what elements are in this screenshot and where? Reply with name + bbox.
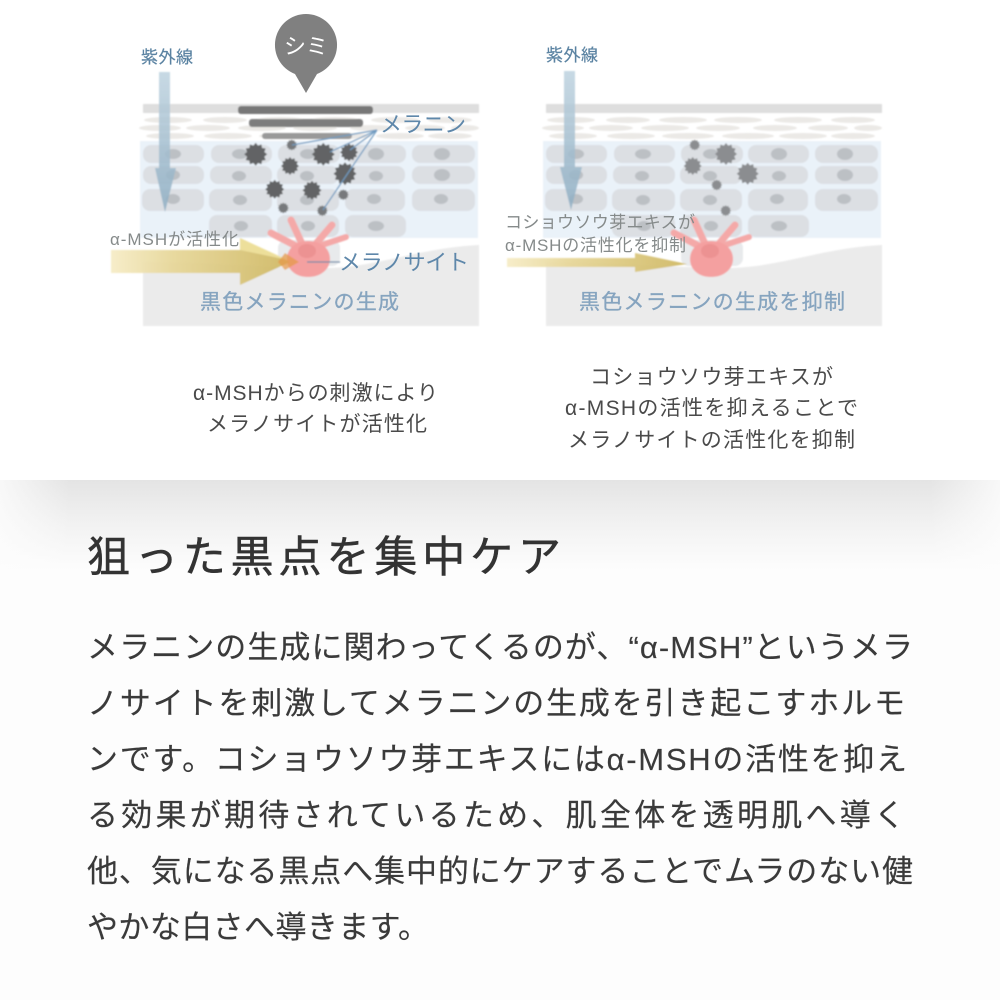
label: UV right: 紫外線 [546, 46, 598, 65]
label: black melanin suppressed: 黒色メラニンの生成を抑制 [579, 291, 845, 314]
label: extract suppresses: α-MSHの活性化を抑制 [505, 236, 686, 255]
heading: 狙った黒点を集中ケア [87, 534, 561, 582]
arrow: UV [155, 72, 176, 212]
label: alpha-MSH active: α-MSHが活性化 [110, 230, 239, 249]
label: melanocyte: メラノサイト [339, 250, 469, 275]
caption: right [565, 366, 858, 452]
melanin bands [238, 106, 373, 139]
panel: left skin diagram [111, 72, 479, 326]
melanin particles [244, 140, 358, 216]
caption: right: メラノサイトの活性化を抑制 [568, 429, 855, 452]
caption: left [193, 382, 438, 436]
panel: right skin diagram [507, 71, 882, 326]
melanin leader lines [292, 130, 377, 210]
melanin particles [684, 140, 759, 216]
label: extract suppresses [505, 213, 695, 255]
icon: melanocyte [271, 220, 346, 277]
body text: ノサイトを刺激してメラニンの生成を引き起こすホルモ [87, 686, 905, 721]
body text: る効果が期待されているため、肌全体を透明肌へ導く [87, 798, 905, 833]
icon: シミ bubble [275, 14, 337, 93]
label: black melanin production: 黒色メラニンの生成 [200, 291, 399, 314]
body text [87, 630, 913, 945]
label: UV left: 紫外線 [141, 48, 193, 67]
arrow: yellow alpha-MSH [111, 238, 299, 285]
caption: right: コショウソウ芽エキスが [590, 366, 833, 389]
body text: やかな白さへ導きます。 [87, 910, 429, 945]
icon: シミ bubble: シミ [284, 34, 328, 59]
caption: right: α-MSHの活性を抑えることで [565, 397, 858, 420]
label: extract suppresses: コショウソウ芽エキスが [505, 213, 695, 232]
arrow: UV [560, 71, 582, 210]
caption: left: メラノサイトが活性化 [207, 413, 427, 436]
label: melanin: メラニン [380, 112, 466, 137]
body text: メラニンの生成に関わってくるのが、“α-MSH”というメラ [87, 630, 913, 665]
body text: 他、気になる黒点へ集中的にケアすることでムラのない健 [87, 854, 913, 889]
leader line to melanocyte [307, 261, 340, 263]
body text: ンです。コショウソウ芽エキスにはα-MSHの活性を抑え [87, 742, 907, 777]
caption: left: α-MSHからの刺激により [193, 382, 438, 405]
icon: melanocyte [674, 220, 749, 277]
background shadow band [0, 480, 1000, 1000]
skin layers and cells [139, 104, 479, 326]
skin layers and cells [542, 104, 882, 326]
arrow: yellow suppressed [507, 253, 687, 272]
